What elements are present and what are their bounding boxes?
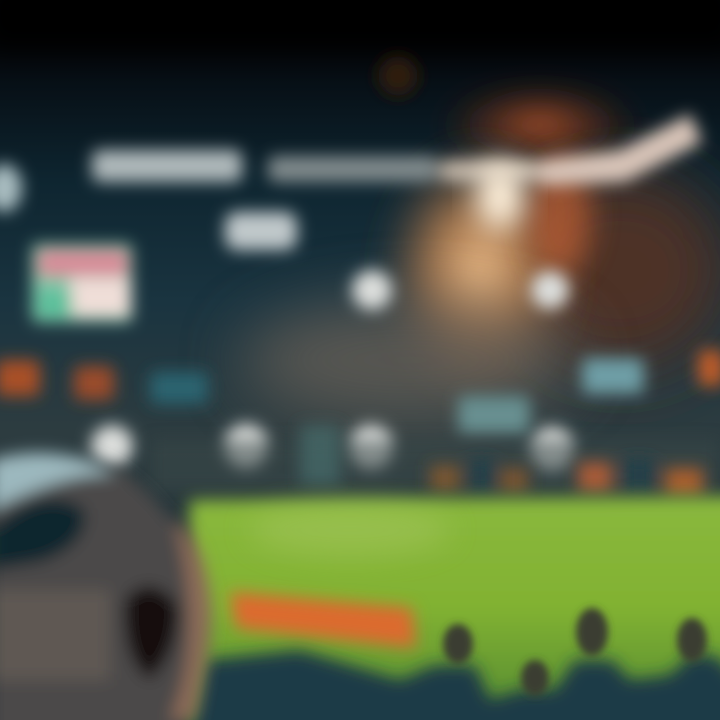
dark top band	[0, 0, 720, 55]
spectator heads	[443, 608, 707, 696]
orange advertising banner	[230, 592, 416, 648]
left edge light	[0, 164, 22, 212]
title band	[92, 114, 702, 250]
football pitch	[180, 496, 720, 720]
foreground spectators	[190, 650, 720, 720]
crowd colour spots	[300, 425, 703, 496]
orange edge of light	[528, 155, 592, 275]
right side warm haze	[510, 170, 720, 370]
central light glow	[375, 135, 585, 405]
crowd stand band	[150, 440, 720, 492]
foreground ball	[0, 453, 212, 720]
top dim orb	[378, 56, 418, 96]
scoreboard flag	[32, 244, 132, 322]
crowd banners	[0, 350, 720, 434]
lower haze	[240, 300, 580, 420]
orange flare	[440, 83, 640, 167]
pitch highlight	[250, 504, 450, 556]
sun highlight	[476, 162, 524, 230]
stadium lights	[91, 270, 574, 471]
